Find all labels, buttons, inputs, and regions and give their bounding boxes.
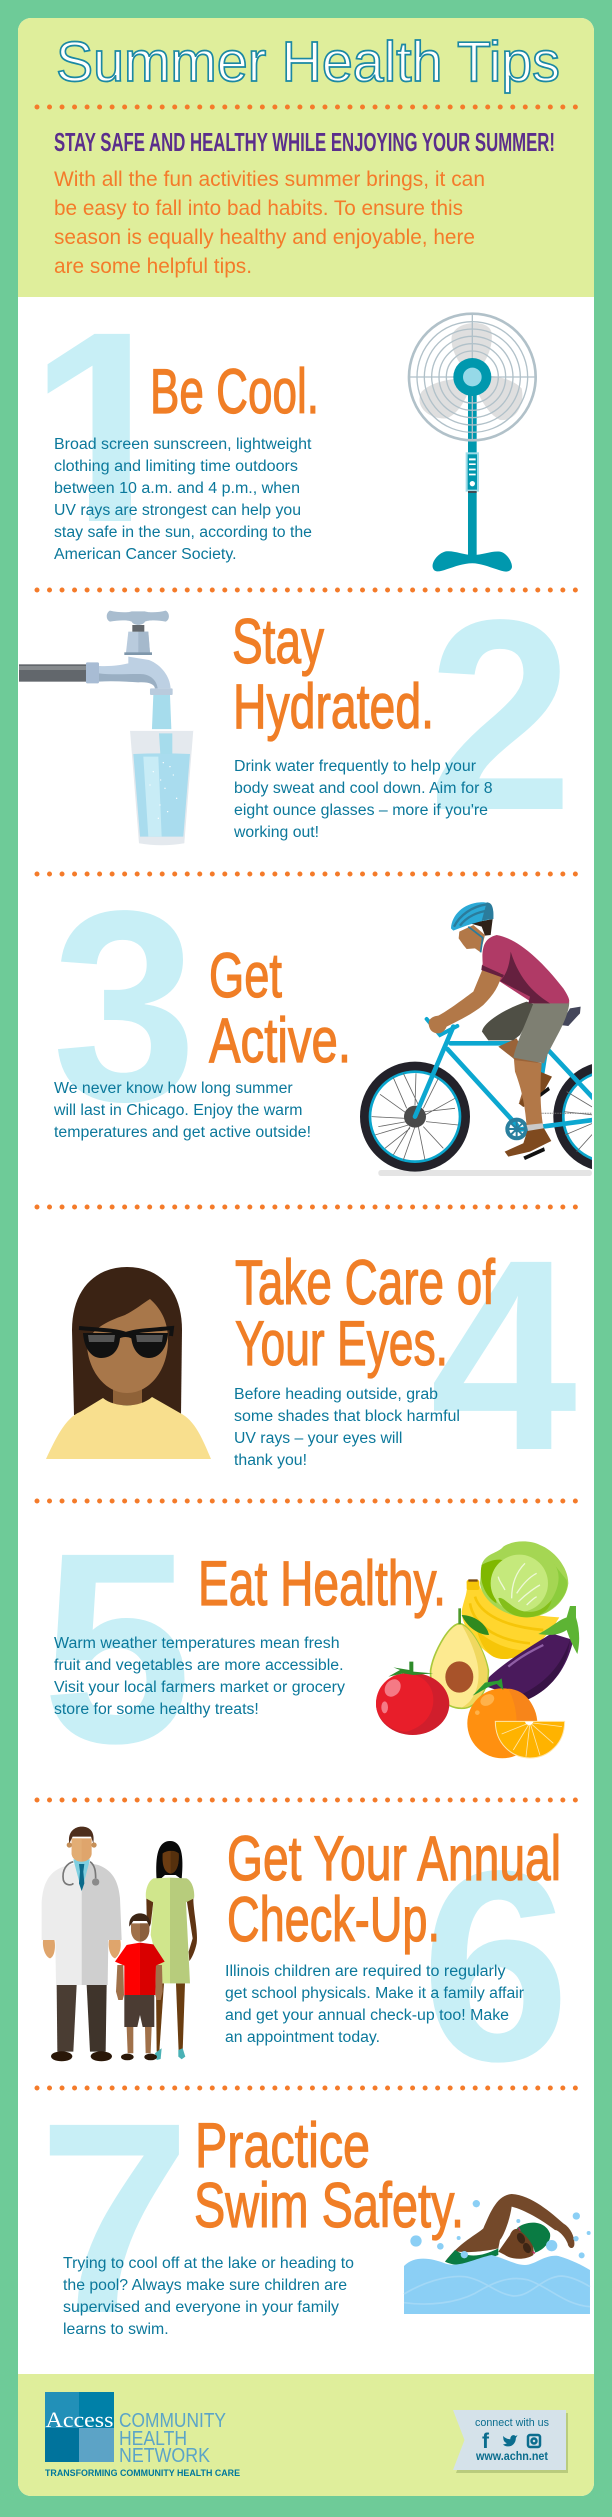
number 4: 4 (430, 1203, 579, 1507)
heading: practice swim safety: Practice (195, 2111, 370, 2181)
body text: and get your annual check-up too! Make (225, 2007, 509, 2024)
icon: doctor, mother and child (42, 1827, 197, 2061)
body text (63, 2255, 354, 2338)
body text: some shades that block harmful (234, 1408, 460, 1425)
body text: working out! (233, 824, 319, 841)
body text (54, 1635, 345, 1718)
body text: Illinois children are required to regularly (225, 1963, 506, 1980)
heading: take care of your eyes: Your Eyes. (235, 1309, 448, 1379)
heading: stay hydrated (232, 607, 434, 742)
icon: cyclist (365, 902, 612, 1176)
intro text: are some helpful tips. (54, 254, 252, 278)
logo: access community health network (45, 2392, 240, 2478)
heading: get active (209, 941, 351, 1076)
logo: access community health network: TRANSFORMING COMMUNITY HEALTH CARE (45, 2468, 240, 2478)
body text: clothing and limiting time outdoors (54, 458, 298, 475)
body text: thank you! (234, 1452, 307, 1469)
body text: Warm weather temperatures mean fresh (54, 1635, 340, 1652)
body text: store for some healthy treats! (54, 1701, 259, 1718)
panel: tip 4 take care of your eyes (46, 1203, 579, 1507)
panel: tip 6 annual check-up (42, 1814, 570, 2118)
heading: stay hydrated: Hydrated. (233, 672, 434, 742)
intro text: season is equally healthy and enjoyable, here (54, 225, 475, 249)
body text: eight ounce glasses – more if you're (234, 802, 488, 819)
body text: Visit your local farmers market or grocery (54, 1679, 345, 1696)
body text (233, 758, 493, 841)
icon: instagram (528, 2435, 540, 2447)
number 5: 5 (42, 1496, 192, 1800)
heading: eat healthy: Eat Healthy. (198, 1549, 446, 1619)
body text: between 10 a.m. and 4 p.m., when (54, 480, 300, 497)
icon: facebook: f (482, 2430, 490, 2453)
heading: stay hydrated: Stay (232, 607, 324, 677)
panel: tip 7 swim safety (38, 2066, 591, 2370)
body text: Drink water frequently to help your (234, 758, 476, 775)
body text: fruit and vegetables are more accessible. (54, 1657, 344, 1674)
body text: stay safe in the sun, according to the (54, 524, 312, 541)
panel: tip 1 be cool (48, 312, 537, 572)
intro text: be easy to fall into bad habits. To ensure this (54, 196, 463, 220)
heading: get active: Get (209, 941, 282, 1011)
body text (225, 1963, 524, 2046)
icon: fruit and vegetables (376, 1541, 579, 1758)
title: Summer Health Tips (56, 30, 560, 94)
body text: We never know how long summer (54, 1080, 293, 1097)
logo: access community health network: Access (46, 2407, 114, 2432)
number 1: 1 (29, 275, 180, 579)
panel: tip 5 eat healthy (42, 1496, 579, 1800)
body text: get school physicals. Make it a family affair (225, 1985, 524, 2002)
number 6: 6 (421, 1814, 570, 2118)
heading: get your annual check-up: Check-Up. (227, 1885, 440, 1955)
number 2: 2 (428, 563, 573, 867)
logo: access community health network: NETWORK (119, 2445, 211, 2467)
body text: learns to swim. (63, 2321, 169, 2338)
body text: body sweat and cool down. Aim for 8 (234, 780, 493, 797)
body text: Before heading outside, grab (234, 1386, 438, 1403)
body text: will last in Chicago. Enjoy the warm (53, 1102, 302, 1119)
icon: faucet and glass (19, 611, 193, 845)
heading: take care of your eyes: Take Care of (235, 1248, 495, 1318)
body text: temperatures and get active outside! (54, 1124, 311, 1141)
intro text: With all the fun activities summer brings, it can (54, 167, 485, 191)
panel: footer (18, 2374, 594, 2496)
logo: access community health network: COMMUNITY (119, 2410, 226, 2432)
body text: American Cancer Society. (54, 546, 236, 563)
body text: Broad screen sunscreen, lightweight (54, 436, 312, 453)
heading: practice swim safety: Swim Safety. (194, 2171, 464, 2241)
body text: supervised and everyone in your family (63, 2299, 339, 2316)
body text: the pool? Always make sure children are (63, 2277, 347, 2294)
panel: header (18, 18, 594, 297)
intro text (54, 167, 485, 278)
heading: get active: Active. (209, 1006, 351, 1076)
icon: swimmer (404, 2194, 591, 2314)
heading: get your annual check-up (227, 1824, 561, 1955)
badge: connect with us: connect with us (475, 2417, 549, 2429)
heading: practice swim safety (194, 2111, 464, 2241)
body text: UV rays – your eyes will (234, 1430, 402, 1447)
heading: be cool: Be Cool. (150, 357, 319, 427)
icon: twitter (503, 2435, 518, 2446)
number 3: 3 (52, 854, 197, 1158)
icon: fan (409, 314, 536, 572)
body text: UV rays are strongest can help you (54, 502, 301, 519)
body text (234, 1386, 460, 1469)
logo: access community health network: HEALTH (119, 2428, 187, 2450)
panel: tip 3 get active (54, 902, 592, 1176)
icon: woman with sunglasses (46, 1267, 211, 1459)
badge: connect with us: www.achn.net (475, 2451, 548, 2463)
body text (54, 436, 312, 563)
panel: tip 2 stay hydrated (19, 563, 573, 867)
body text: Trying to cool off at the lake or heading to (63, 2255, 354, 2272)
body text: an appointment today. (225, 2029, 380, 2046)
body text (53, 1080, 311, 1141)
number 7: 7 (38, 2066, 191, 2370)
heading: take care of your eyes (235, 1248, 495, 1379)
badge: connect with us (453, 2410, 568, 2473)
